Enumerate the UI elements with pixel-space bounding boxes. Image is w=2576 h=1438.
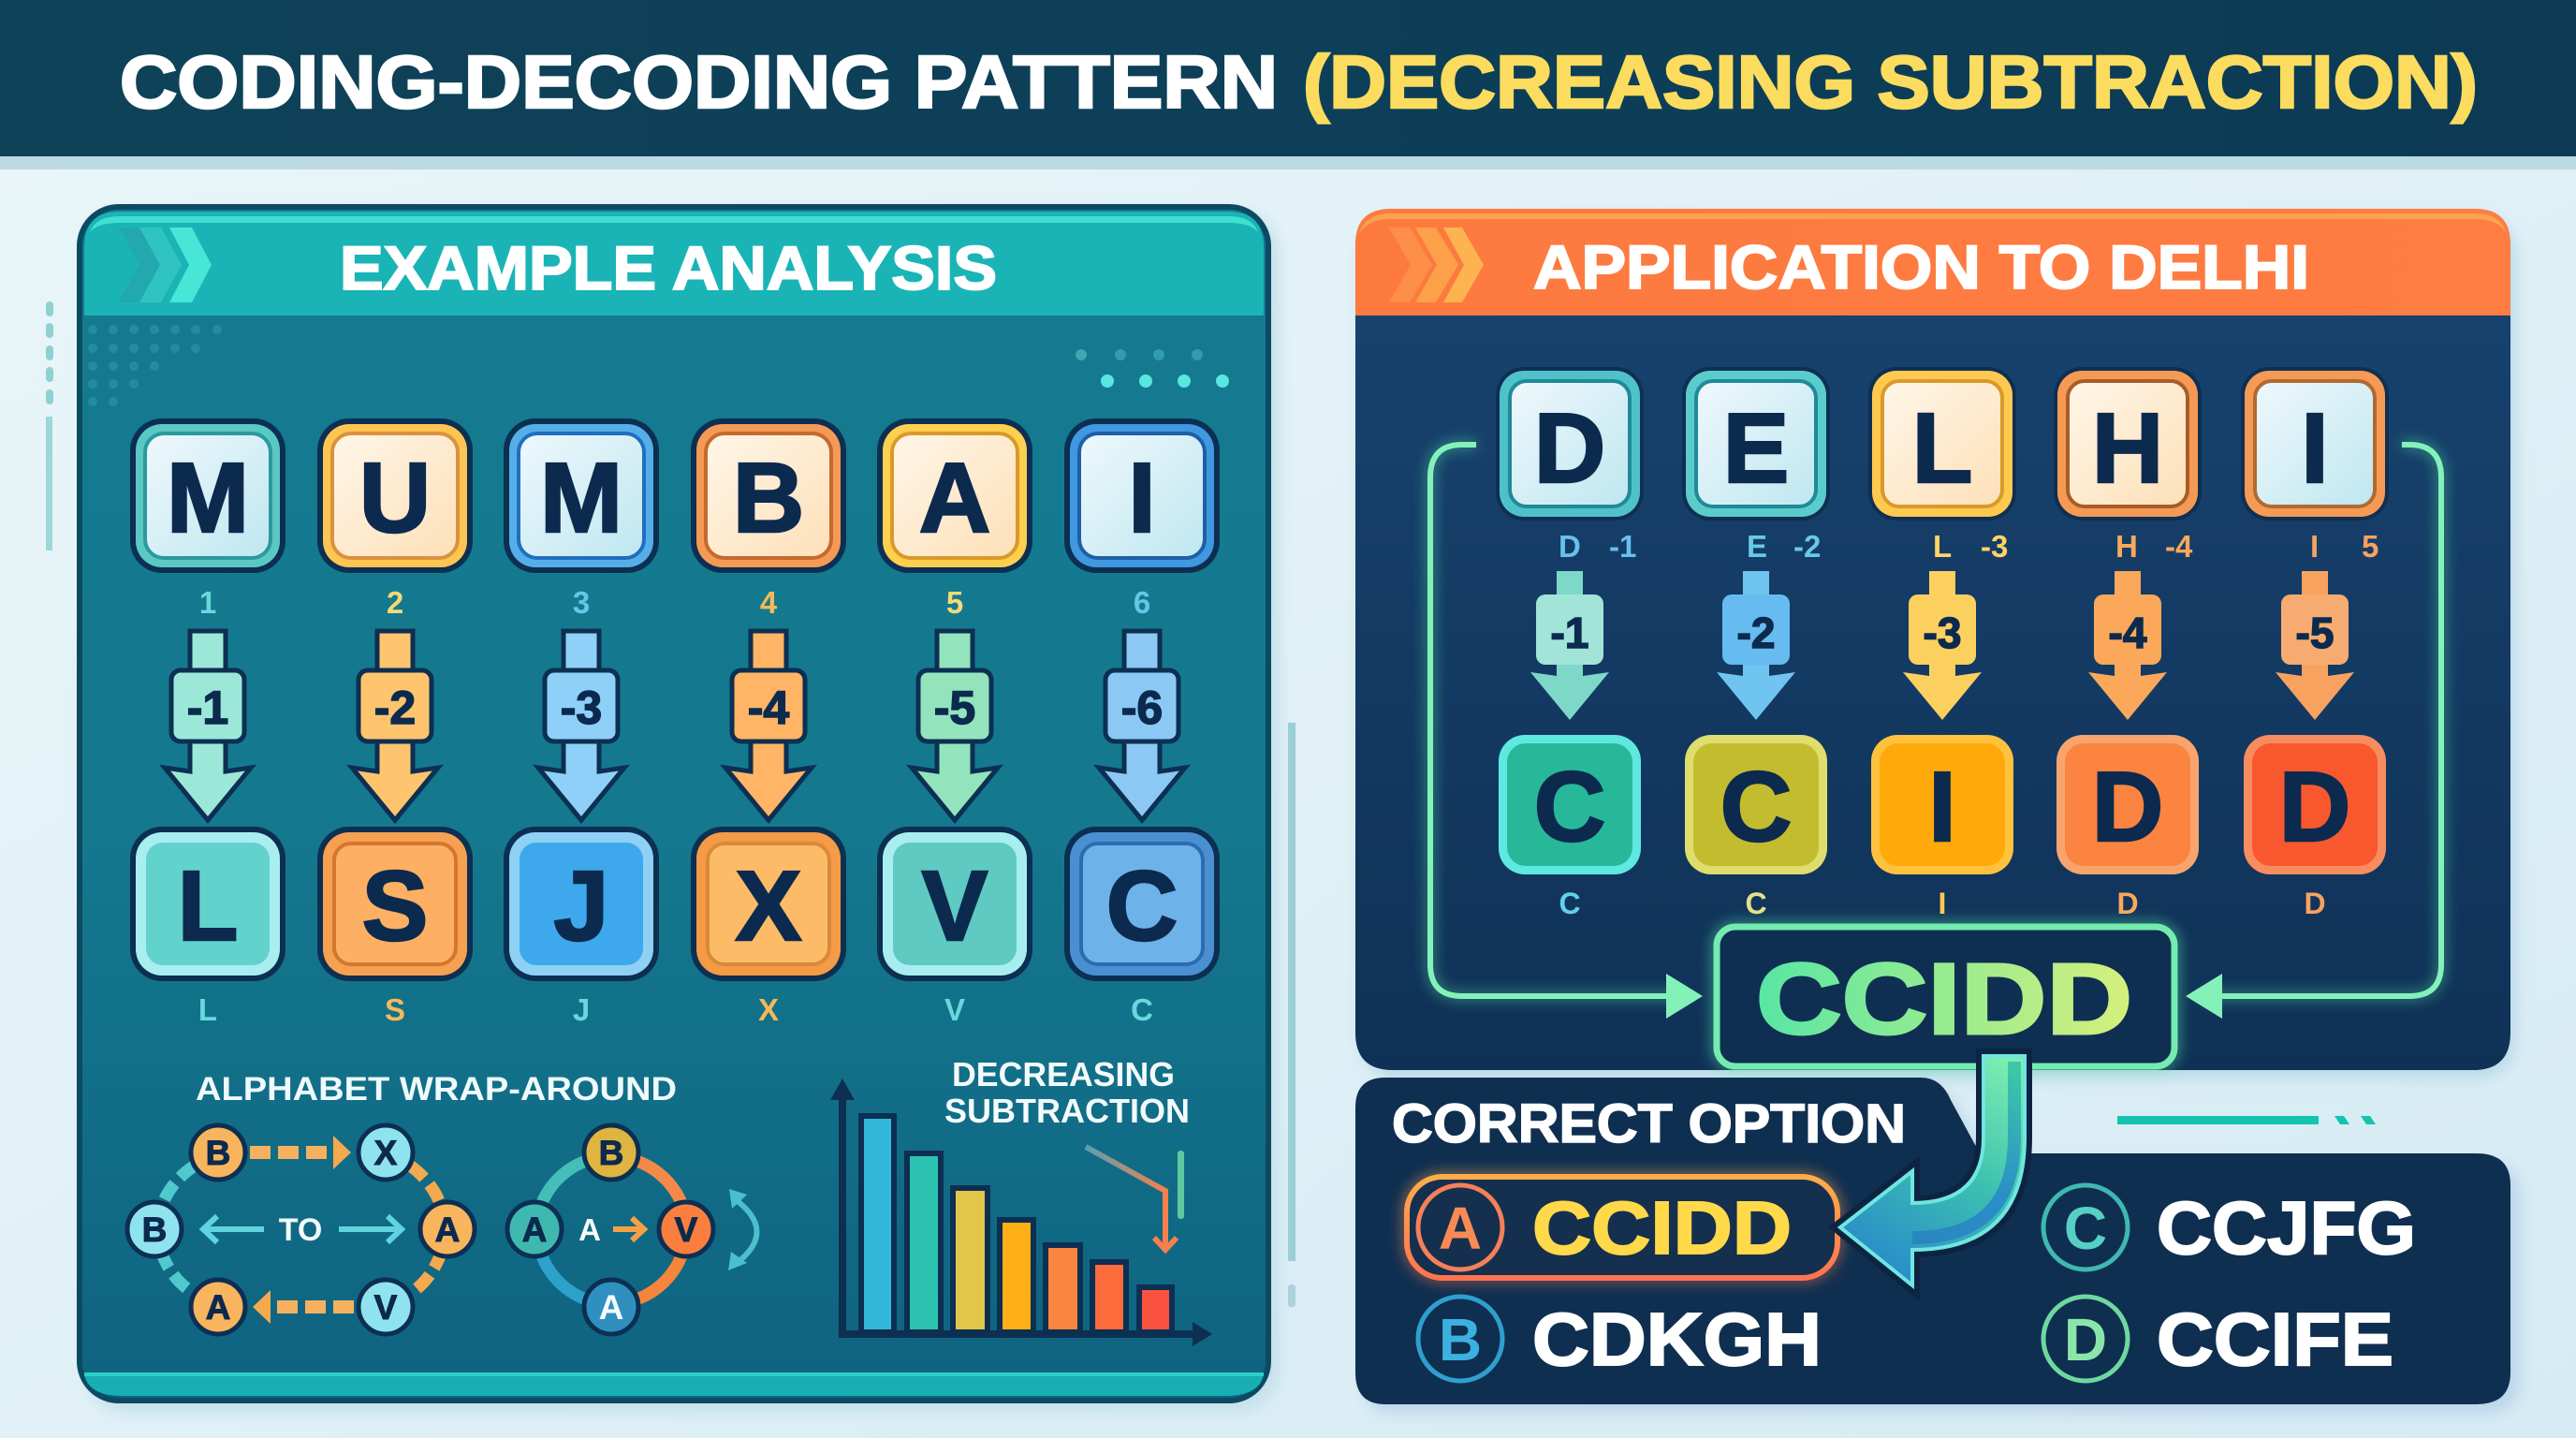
trend arrow: [1086, 1147, 1165, 1247]
option A (correct): [1407, 1177, 1837, 1278]
tile: M: [130, 418, 285, 573]
arrow: minus 5: [2276, 571, 2354, 720]
node X: X: [374, 1134, 398, 1172]
tile: X: [691, 827, 846, 981]
tile: C: C: [1106, 851, 1178, 961]
result letters: C: [1745, 887, 1767, 920]
result letters: L: [198, 992, 217, 1027]
decorative dots right: [1076, 349, 1229, 388]
option C: [2043, 1185, 2416, 1269]
arrow: minus 5: -5: [934, 682, 975, 734]
arrow: minus 3: [1903, 571, 1982, 720]
node B left: B: [142, 1211, 167, 1249]
arrow: minus 5: [912, 631, 998, 820]
option D: D: [2064, 1306, 2107, 1373]
step labels: L: [1933, 529, 1952, 564]
option B: [1418, 1297, 1822, 1381]
node V: V: [374, 1288, 398, 1327]
step labels: I: [2310, 529, 2319, 564]
diagram: wrap-around ring: [507, 1125, 757, 1334]
tile: D: [2244, 735, 2386, 874]
node B left: [127, 1202, 182, 1256]
label: A to V: [578, 1212, 644, 1247]
option C: CCJFG: [2157, 1186, 2416, 1269]
arrow: minus 4: [2088, 571, 2167, 720]
node A: A: [522, 1211, 547, 1249]
result letters: V: [944, 992, 965, 1027]
tile: C: [1064, 827, 1220, 981]
chart label: SUBTRACTION: [944, 1092, 1190, 1130]
arrow: minus 1: [165, 631, 251, 820]
tile: L: [130, 827, 285, 981]
panel heading: EXAMPLE ANALYSIS: [340, 233, 997, 302]
tile: H: H: [2092, 393, 2163, 504]
label: to with arrows: TO: [279, 1212, 322, 1248]
panel: example analysis: [80, 207, 1279, 1412]
tile: J: J: [554, 851, 608, 961]
result box: CCIDD: [1717, 927, 2174, 1066]
arrow: result to correct option: [1840, 1056, 2025, 1285]
tile: D: D: [2279, 752, 2350, 862]
tile: C: [1499, 735, 1641, 874]
arrow: minus 4: [725, 631, 812, 820]
icon: chevrons: [1389, 227, 1484, 302]
tile: C: [1685, 735, 1827, 874]
step labels: E: [1747, 529, 1767, 564]
option B: CDKGH: [1532, 1298, 1822, 1381]
node V: V: [675, 1211, 698, 1249]
tile: U: [317, 418, 473, 573]
tile: L: L: [178, 851, 238, 961]
tile: I: I: [2301, 393, 2329, 504]
position numbers: 6: [1134, 585, 1150, 620]
tile: S: S: [362, 851, 428, 961]
tile: V: V: [922, 851, 988, 961]
tile: M: M: [540, 443, 622, 553]
tile: I: [2241, 367, 2389, 521]
arrow: minus 2: [352, 631, 438, 820]
option A (correct): A: [1439, 1195, 1482, 1262]
node X: [359, 1125, 413, 1180]
result box: CCIDD: CCIDD: [1756, 942, 2132, 1055]
tile: C: C: [1720, 752, 1792, 862]
option heading: CORRECT OPTION: [1392, 1093, 1906, 1154]
step labels: [1559, 529, 2378, 564]
arrow: minus 2: -2: [1737, 609, 1775, 657]
option D: CCIFE: [2157, 1298, 2393, 1381]
tile: A: [877, 418, 1032, 573]
node A lower: [191, 1280, 245, 1334]
result letters: [198, 992, 1153, 1027]
label: to with arrows: [203, 1212, 402, 1248]
label: A to V: A: [578, 1212, 601, 1247]
arrow: minus 6: -6: [1121, 682, 1163, 734]
tile: V: [877, 827, 1032, 981]
tile: X: X: [736, 851, 801, 961]
tile: U: U: [359, 443, 431, 553]
result letters: D: [2116, 887, 2139, 920]
tile: I: [1871, 735, 2013, 874]
tile: H: [2054, 367, 2202, 521]
step labels: -1: [1609, 529, 1636, 564]
arrow: minus 2: -2: [374, 682, 416, 734]
chart label: DECREASING: [952, 1055, 1175, 1093]
step labels: D: [1559, 529, 1581, 564]
position numbers: 4: [760, 585, 778, 620]
arrow: minus 2: [1717, 571, 1795, 720]
tile: L: [1868, 367, 2016, 521]
tile: C: C: [1534, 752, 1605, 862]
step labels: H: [2115, 529, 2138, 564]
panel heading: APPLICATION TO DELHI: [1533, 232, 2309, 301]
tile: A: A: [919, 443, 990, 553]
arrow: minus 3: -3: [561, 682, 602, 734]
bar chart: decreasing subtraction: [830, 1055, 1212, 1346]
option A (correct): CCIDD: [1532, 1186, 1792, 1269]
tile: B: [691, 418, 846, 573]
result letters: X: [758, 992, 779, 1027]
arrow: minus 3: [538, 631, 624, 820]
panel: application to Delhi: [1355, 209, 2516, 1078]
alphabet wrap-around heading: ALPHABET WRAP-AROUND: [196, 1071, 677, 1108]
tile: S: [317, 827, 473, 981]
tile: M: M: [167, 443, 249, 553]
result letters: J: [573, 992, 590, 1027]
tile: B: B: [733, 443, 804, 553]
node B: [584, 1125, 638, 1180]
node A: [507, 1202, 562, 1256]
node B: [191, 1125, 245, 1180]
tile: E: E: [1723, 393, 1789, 504]
title: CODING-DECODING PATTERN: [120, 40, 1278, 124]
node V: [659, 1202, 713, 1256]
step labels: -4: [2165, 529, 2193, 564]
node A lower: [584, 1280, 638, 1334]
result letters: C: [1131, 992, 1153, 1027]
arrow: minus 1: [1530, 571, 1609, 720]
axes: [842, 1100, 1194, 1334]
tile: I: I: [1128, 443, 1156, 553]
decorative teal line: [2117, 1116, 2376, 1124]
option D: [2043, 1297, 2393, 1381]
node B: B: [599, 1134, 623, 1172]
position numbers: 5: [946, 585, 963, 620]
tile: D: D: [2092, 752, 2163, 862]
icon: rotation arrow: [728, 1189, 757, 1270]
icon: chevrons: [119, 227, 212, 302]
arrow: minus 1: -1: [187, 682, 228, 734]
arrow: minus 1: -1: [1551, 609, 1588, 657]
node A right: [420, 1202, 475, 1256]
tile: M: [504, 418, 659, 573]
tile: E: [1682, 367, 1830, 521]
arrow: minus 4: -4: [748, 682, 789, 734]
green loop connector: [1430, 445, 2441, 1019]
arrow: minus 4: -4: [2109, 609, 2147, 657]
node A lower: A: [206, 1288, 230, 1327]
arrow: minus 5: -5: [2296, 609, 2334, 657]
node A lower: A: [599, 1288, 623, 1327]
title highlight: (DECREASING SUBTRACTION): [1303, 40, 2478, 124]
tile: I: I: [1928, 752, 1956, 862]
result letters: C: [1559, 887, 1581, 920]
node A right: A: [435, 1211, 460, 1249]
node B: B: [206, 1134, 230, 1172]
tile: D: [2056, 735, 2199, 874]
step labels: -2: [1793, 529, 1821, 564]
result letters: S: [385, 992, 405, 1027]
position numbers: 1: [199, 585, 216, 620]
arrow: minus 6: [1099, 631, 1185, 820]
header banner: [0, 0, 2576, 169]
result letters: I: [1939, 887, 1946, 920]
tile: I: [1064, 418, 1220, 573]
tile: L: L: [1912, 393, 1972, 504]
result letters: [1559, 887, 2326, 920]
position numbers: 2: [387, 585, 403, 620]
node V: [359, 1280, 413, 1334]
result letters: D: [2304, 887, 2326, 920]
tile: J: [504, 827, 659, 981]
decorative dots left: [88, 325, 222, 406]
arrow: minus 3: -3: [1924, 609, 1961, 657]
bars: [861, 1116, 1172, 1332]
panel: correct option: [1355, 1078, 2520, 1414]
step labels: 5: [2362, 529, 2378, 564]
tile: D: [1496, 367, 1644, 521]
position numbers: 3: [573, 585, 590, 620]
step labels: -3: [1981, 529, 2008, 564]
option B: B: [1439, 1306, 1482, 1373]
decorative side marks: [46, 301, 1295, 1307]
diagram: wrap-around hexagon: [127, 1125, 475, 1334]
position numbers: [199, 585, 1150, 620]
tile: D: D: [1534, 393, 1605, 504]
option C: C: [2064, 1195, 2107, 1262]
